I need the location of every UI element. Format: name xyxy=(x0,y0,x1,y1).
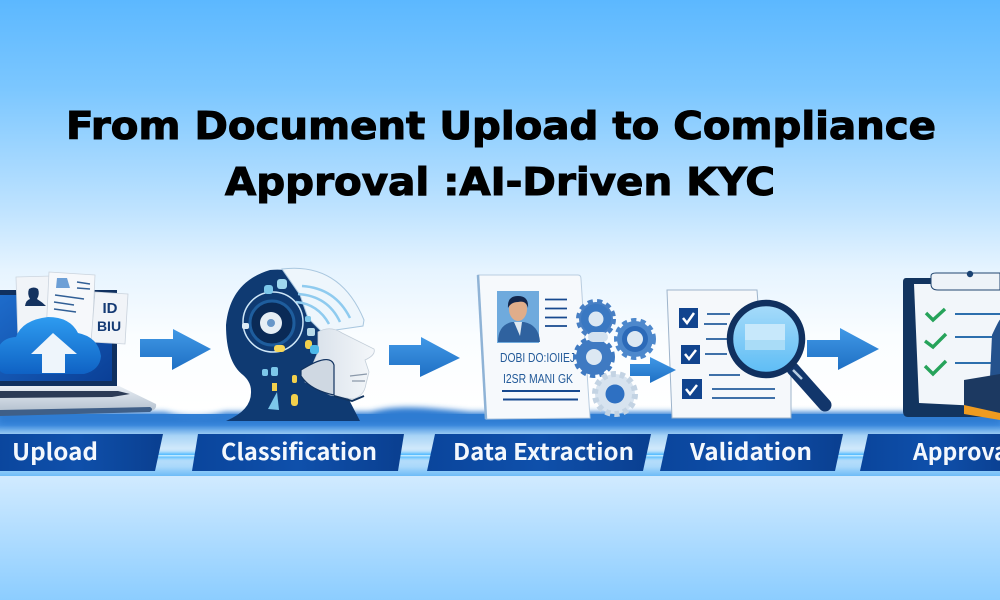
label: data extraction xyxy=(427,433,651,471)
labels row xyxy=(0,433,1000,471)
arrow: small xyxy=(630,357,676,383)
arrow 1 xyxy=(140,329,211,370)
label: approval xyxy=(860,433,1000,471)
document: I2SR MANI GK xyxy=(503,372,574,386)
icon: face xyxy=(305,329,374,399)
icon: helmet xyxy=(282,268,364,332)
arrow 2 xyxy=(389,337,460,377)
step 1: upload illustration xyxy=(0,272,156,416)
icon: clipboard xyxy=(903,271,1000,417)
portrait xyxy=(497,291,540,343)
icon: ID documents xyxy=(16,272,128,344)
step 5: approval illustration xyxy=(903,271,1000,420)
label: validation xyxy=(660,433,843,471)
label: validation: Validation xyxy=(689,433,812,467)
step 4: validation illustration xyxy=(667,290,825,418)
icon: ID documents: ID xyxy=(102,300,118,317)
circuit ring xyxy=(242,279,319,410)
icon: laptop xyxy=(0,290,156,416)
label: upload: Upload xyxy=(12,433,98,467)
title: Approval :AI-Driven KYC xyxy=(225,160,775,205)
label: data extraction: Data Extraction xyxy=(453,433,634,467)
floor band xyxy=(0,407,1000,476)
label: classification xyxy=(192,433,404,471)
title: From Document Upload to Compliance xyxy=(66,104,936,149)
icon: stamp xyxy=(964,320,1000,420)
icon: head xyxy=(226,270,360,421)
icon: gears xyxy=(576,302,653,414)
label: classification: Classification xyxy=(221,433,377,467)
title xyxy=(66,104,936,205)
document xyxy=(478,275,590,419)
document: DOBI DO:IOIIEJ xyxy=(500,351,575,365)
arrow 3 xyxy=(807,328,879,370)
icon: magnifier xyxy=(730,303,825,405)
label: upload xyxy=(0,433,163,471)
icon: upload cloud xyxy=(0,317,101,374)
step 2: AI head illustration xyxy=(226,268,374,421)
step 3: data extraction illustration xyxy=(478,275,653,419)
checklist document xyxy=(667,290,791,418)
icon: ID documents: BIU xyxy=(97,318,121,334)
